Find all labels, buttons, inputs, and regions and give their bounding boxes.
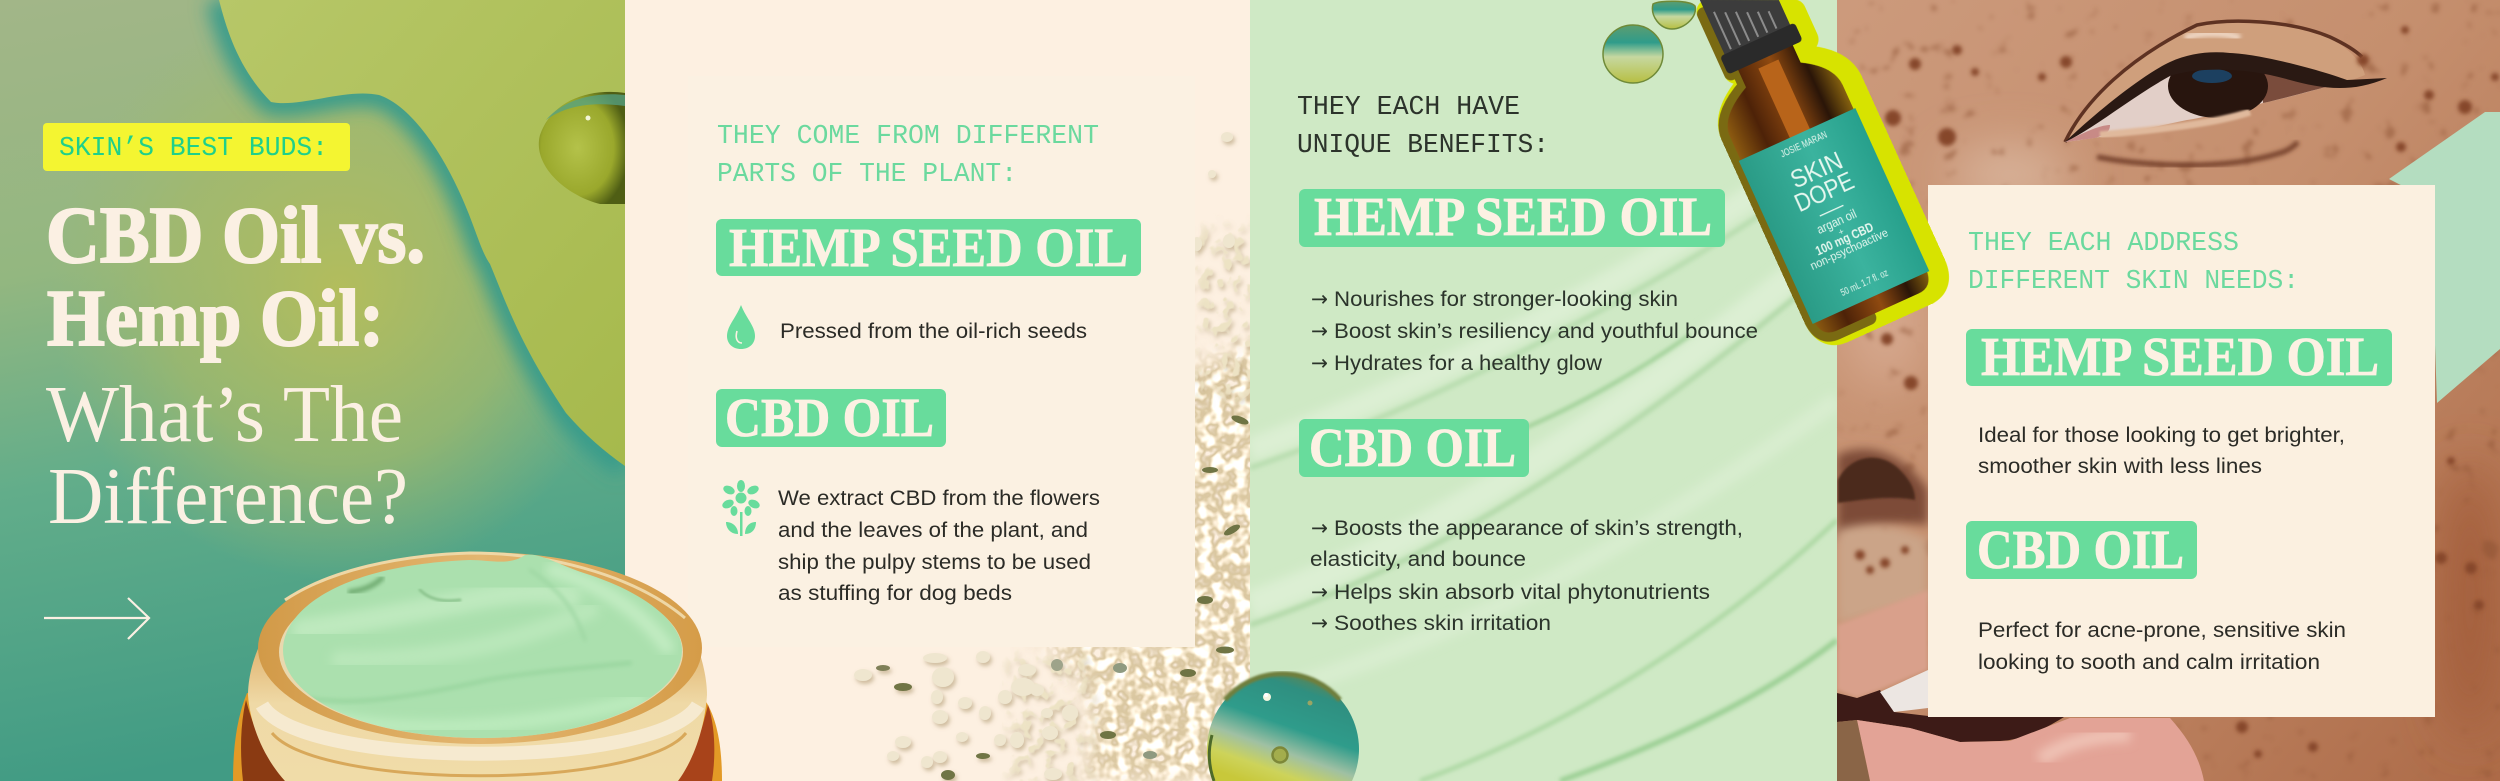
eye (2065, 21, 2387, 165)
pill: cbd oil: CBD OIL (725, 387, 934, 448)
headline (46, 190, 425, 541)
freckles (1855, 26, 2499, 758)
teeth (1880, 670, 1928, 712)
heading: THEY COME FROM DIFFERENT (717, 121, 1099, 151)
panel: cream swatch background (1250, 0, 1837, 781)
bottle label: 50 mL 1.7 fl. oz (1839, 268, 1890, 299)
heading (1297, 92, 1549, 160)
cream surface (283, 554, 682, 738)
bottle label: argan oil (1815, 207, 1859, 237)
list: hemp benefits: → (1311, 319, 1328, 343)
green clay mask smear (2389, 112, 2500, 403)
droplet (1603, 25, 1663, 83)
seed pile (1046, 336, 1250, 781)
heading: PARTS OF THE PLANT: (717, 159, 1017, 189)
amber interior right (675, 705, 714, 781)
list: cbd benefits: Soothes skin irritation (1334, 611, 1551, 635)
amber interior left (241, 700, 285, 781)
eye opening (2065, 76, 2326, 142)
tag: skin's best buds (43, 123, 350, 171)
oil edge shadow (219, 0, 625, 466)
headline: CBD Oil vs. (46, 190, 425, 280)
skin highlights (1845, 150, 2500, 740)
icon: Skin Dope dropper bottle (1671, 0, 1942, 340)
list: cbd benefits: elasticity, and bounce (1310, 547, 1526, 571)
list: hemp benefits (1311, 287, 1758, 375)
bottle label: SKIN (1786, 147, 1847, 194)
eyelid crease (2065, 21, 2362, 142)
lower lid (2100, 112, 2250, 135)
list: cbd benefits: → (1311, 580, 1328, 604)
text: cbd skin need: Perfect for acne-prone, sensitive skin (1978, 618, 2346, 642)
heading: UNIQUE BENEFITS: (1297, 130, 1549, 160)
mouth shadow (1837, 690, 2064, 742)
bottle label: DOPE (1790, 167, 1858, 218)
lower crease (2097, 142, 2298, 165)
bottle label (1739, 108, 1929, 324)
icon: oil bubble (1207, 673, 1359, 781)
dark seeds in pile (1100, 414, 1250, 759)
oil pool (219, 0, 625, 466)
icon: cream jar (233, 545, 722, 781)
text: cbd skin need (1978, 618, 2346, 674)
bottle yellow cut-out outline (1683, 0, 1942, 338)
list: cbd benefits: Helps skin absorb vital phytonutrients (1334, 580, 1710, 604)
list: cbd benefits: Boosts the appearance of skin’s strength, (1334, 516, 1743, 540)
glass (1706, 33, 1934, 338)
heading: THEY EACH HAVE (1297, 92, 1520, 122)
upper lash line (2065, 52, 2387, 142)
text: cbd extraction: and the leaves of the plant, and (778, 518, 1088, 542)
lower lip (1857, 718, 2204, 781)
freckle texture (1837, 0, 2500, 781)
oil droplet (539, 92, 625, 204)
headline: What’s The (46, 369, 403, 459)
panel: face close-up photo (1837, 0, 2500, 781)
pill: hemp seed oil: HEMP SEED OIL (1314, 186, 1712, 247)
list: hemp benefits: Nourishes for stronger-looking skin (1334, 287, 1678, 311)
bottle label: + (1837, 226, 1846, 238)
iris (2168, 70, 2268, 118)
text: hemp skin need: Ideal for those looking to get brighter, (1978, 423, 2345, 447)
bottle shadow edge (1678, 4, 1869, 340)
dropper tube (1758, 59, 1810, 138)
lower glass band (248, 640, 707, 781)
cap (1695, 0, 1803, 75)
list: cbd benefits: → (1311, 516, 1328, 540)
cream swipe streaks (1250, 170, 1837, 781)
list: hemp benefits: → (1311, 351, 1328, 375)
text: cbd extraction: ship the pulpy stems to be used (778, 550, 1091, 574)
scattered seeds (854, 132, 1265, 781)
bottle label: non-psychoactive (1808, 225, 1891, 273)
heading (717, 121, 1099, 189)
text: cbd extraction (778, 486, 1100, 605)
pill: cbd oil: CBD OIL (1309, 417, 1516, 478)
nose shadow (1837, 449, 1928, 540)
lip highlight (2040, 735, 2130, 760)
section: unique benefits (1297, 92, 1758, 635)
list: hemp benefits: Hydrates for a healthy glow (1334, 351, 1602, 375)
droplet (1652, 1, 1695, 29)
list: cbd benefits: → (1311, 611, 1328, 635)
card: they each address different skin needs (1928, 185, 2435, 717)
right corner shadow (2262, 74, 2326, 103)
heading (1968, 228, 2299, 296)
panel: hemp seeds background (854, 132, 1250, 781)
card: they come from different parts (688, 76, 1195, 647)
text: cbd extraction: We extract CBD from the flowers (778, 486, 1100, 510)
list: hemp benefits: Boost skin’s resiliency and youthful bounce (1334, 319, 1758, 343)
icon: flower (721, 480, 761, 536)
tag: skin's best buds: SKIN’S BEST BUDS: (59, 133, 328, 163)
amber jar body (233, 693, 722, 781)
band lines (262, 705, 698, 776)
nostril (1838, 458, 1915, 503)
icon: oil drop (727, 305, 755, 349)
cream swirls (297, 570, 667, 727)
title block (43, 123, 425, 639)
corner tint (2065, 125, 2110, 142)
text: cbd extraction: as stuffing for dog beds (778, 581, 1012, 605)
chin shadow left (1837, 720, 1870, 781)
heading: THEY EACH ADDRESS (1968, 228, 2239, 258)
text: hemp skin need: smoother skin with less lines (1978, 454, 2262, 478)
pill: cbd oil: CBD OIL (1977, 519, 2184, 580)
text: cbd skin need: looking to sooth and calm irritation (1978, 650, 2320, 674)
bottle label: 100 mg CBD (1813, 219, 1876, 258)
upper lip (1837, 590, 1928, 698)
upper glass rim (258, 552, 702, 744)
bottle label: JOSIE MARAN (1779, 130, 1829, 160)
text: pressed from seeds: Pressed from the oil-rich seeds (780, 319, 1087, 343)
list: hemp benefits: → (1311, 287, 1328, 311)
philtrum skin (1837, 525, 1928, 625)
headline: Hemp Oil: (47, 273, 384, 363)
text: hemp skin need (1978, 423, 2345, 478)
panel: title background with oil swirl (0, 0, 625, 781)
heading: DIFFERENT SKIN NEEDS: (1968, 266, 2299, 296)
pill: hemp seed oil: HEMP SEED OIL (729, 217, 1128, 278)
headline: Difference? (48, 451, 408, 541)
upper eyelid (2065, 21, 2365, 142)
arrow (44, 598, 149, 639)
pill: hemp seed oil: HEMP SEED OIL (1981, 326, 2379, 387)
list: cbd benefits (1310, 516, 1743, 635)
